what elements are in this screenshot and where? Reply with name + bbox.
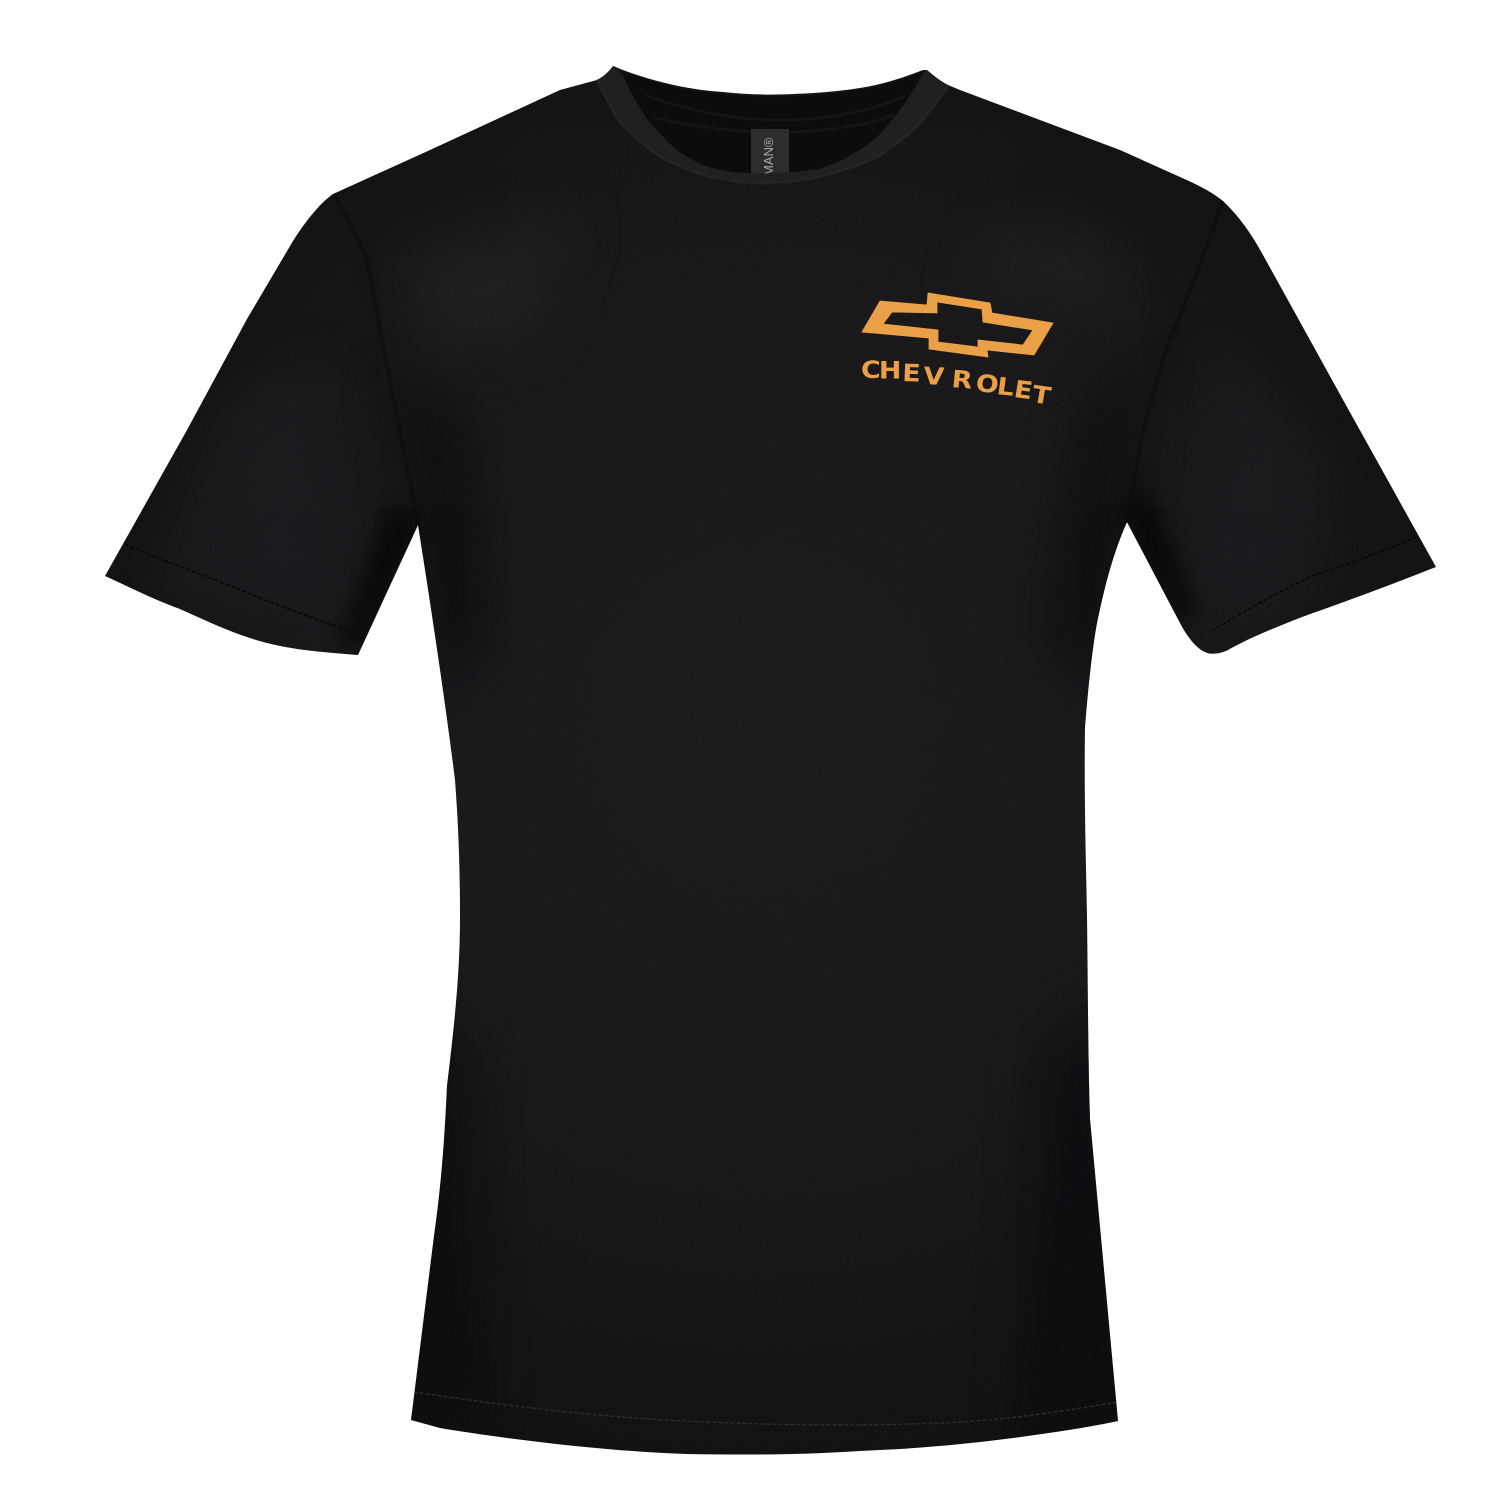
neck tag (751, 129, 789, 179)
fabric grain (430, 458, 1144, 1332)
sleeve seams (332, 193, 410, 476)
chest logo (861, 293, 1054, 411)
fabric shading (125, 193, 1417, 1438)
collar ribbing (597, 66, 948, 183)
tag text: MAN® (761, 137, 776, 176)
inner collar rib line (645, 95, 905, 120)
collar seam (597, 80, 948, 183)
bottom hem stitching (414, 1392, 1118, 1425)
right sleeve hem stitching (1213, 537, 1417, 630)
neck opening, inside back of the collar (623, 72, 923, 176)
icon: chevrolet bowtie outline (862, 293, 1053, 357)
wordmark: CHEVROLET (861, 356, 1054, 411)
left sleeve hem stitching (125, 544, 347, 630)
